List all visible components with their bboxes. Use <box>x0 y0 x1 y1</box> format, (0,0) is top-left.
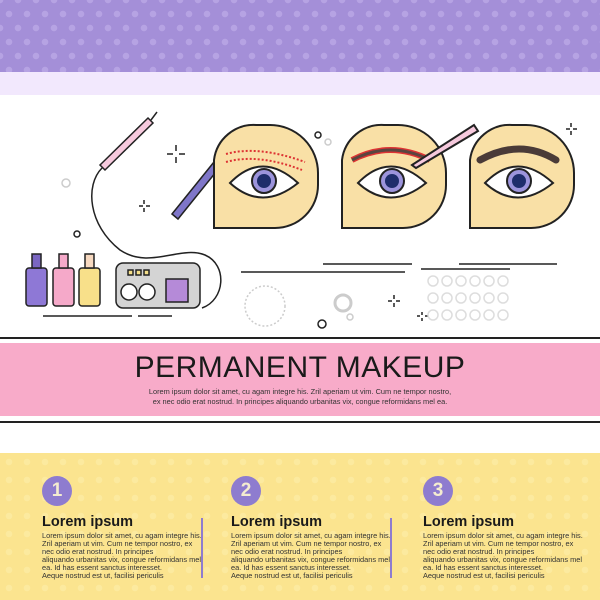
illustration <box>25 112 577 329</box>
step 3: Zril aperiam ut vim. Cum ne tempor nostro, ex <box>423 539 573 548</box>
step 3: nec odio erat nostrud. In principes <box>423 547 534 556</box>
step 1: 1 <box>52 480 62 501</box>
lavender band <box>0 72 600 95</box>
step 2: Zril aperiam ut vim. Cum ne tempor nostro, ex <box>231 539 381 548</box>
step 2: 2 <box>241 480 251 501</box>
face 2 <box>342 125 478 228</box>
face 1 <box>214 125 318 228</box>
step 2: Aeque nostrud est ut, facilisi periculis <box>231 571 353 580</box>
decorations <box>74 123 577 328</box>
step 3: Lorem ipsum dolor sit amet, cu agam integre his. <box>423 531 583 540</box>
step 1: Lorem ipsum <box>42 514 133 530</box>
step 1: aliquando urbanitas vix, congue reformidans mel <box>42 555 201 564</box>
step 2: nec odio erat nostrud. In principes <box>231 547 342 556</box>
step 3: ea. Id has essent sanctus interesset. <box>423 563 543 572</box>
top purple dotted band <box>0 0 600 72</box>
icon: machine <box>116 263 200 308</box>
yellow steps panel <box>0 453 600 600</box>
step 1 <box>42 476 202 580</box>
subtitle <box>149 387 451 406</box>
step 3 <box>423 476 583 580</box>
step 3: Lorem ipsum <box>423 514 514 530</box>
step 2: Lorem ipsum dolor sit amet, cu agam integre his. <box>231 531 391 540</box>
subtitle: Lorem ipsum dolor sit amet, cu agam integre his. Zril aperiam ut vim. Cum ne tempor nostro, <box>149 387 451 396</box>
step 1: Zril aperiam ut vim. Cum ne tempor nostro, ex <box>42 539 192 548</box>
step 1: ea. Id has essent sanctus interesset. <box>42 563 162 572</box>
step 1: nec odio erat nostrud. In principes <box>42 547 153 556</box>
step 2: aliquando urbanitas vix, congue reformidans mel <box>231 555 390 564</box>
step 2 <box>231 476 391 580</box>
step 2: ea. Id has essent sanctus interesset. <box>231 563 351 572</box>
step 3: 3 <box>433 480 443 501</box>
icon: tattoo pen <box>92 112 221 308</box>
step 1: Lorem ipsum dolor sit amet, cu agam integre his. <box>42 531 202 540</box>
title banner <box>0 343 600 416</box>
icon: bottles <box>26 254 100 306</box>
step 1: Aeque nostrud est ut, facilisi periculis <box>42 571 164 580</box>
subtitle: ex nec odio erat nostrud. In principes aliquando urbanitas vix, congue reformidans mel ea. <box>153 396 447 406</box>
step 2: Lorem ipsum <box>231 514 322 530</box>
title: PERMANENT MAKEUP <box>135 351 465 384</box>
step 3: Aeque nostrud est ut, facilisi periculis <box>423 571 545 580</box>
step 3: aliquando urbanitas vix, congue reformidans mel <box>423 555 582 564</box>
icon: eyebrow pencil <box>172 154 222 219</box>
face 3 <box>470 125 574 228</box>
